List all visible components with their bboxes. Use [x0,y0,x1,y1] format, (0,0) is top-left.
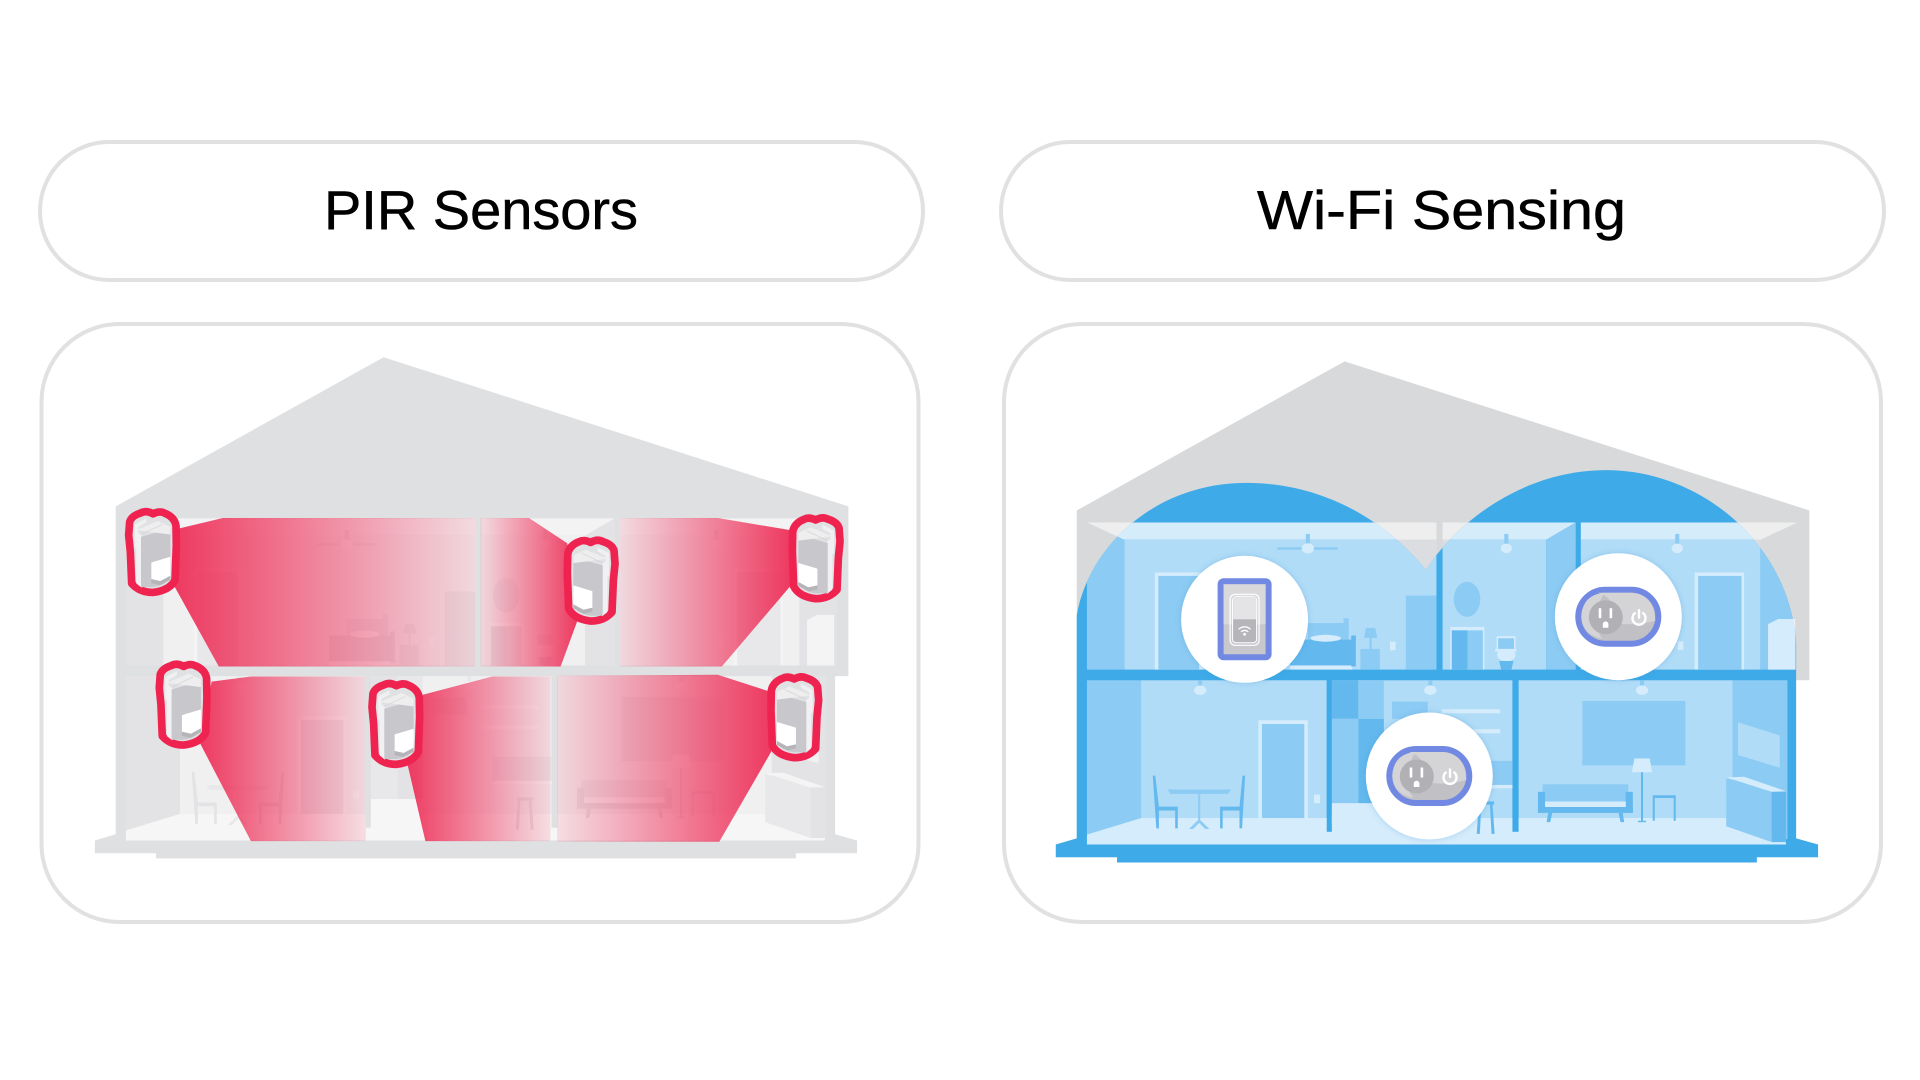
panel: Wi-Fi Sensing heading [1001,142,1884,280]
icon: smart plug, lower centre [1366,712,1493,840]
heading: Wi-Fi Sensing: Wi-Fi Sensing [1257,179,1626,241]
panel: PIR sensors house [42,324,918,922]
house cross-section with blue Wi-Fi coverage [1056,361,1818,862]
infographic: PIR sensors vs Wi-Fi sensing [38,140,1886,924]
icon: PIR sensor, bottom left [159,664,207,745]
icon: PIR sensor, top middle [567,540,615,621]
icon: PIR sensor, bottom middle [372,684,420,764]
icon: smart light switch [1181,556,1308,683]
panel: Wi-Fi sensing house [1004,324,1881,922]
icon: PIR sensor, top left [129,512,176,592]
heading: PIR Sensors: PIR Sensors [324,179,638,241]
red PIR detection beams [174,518,790,842]
icon: PIR sensor, bottom right [771,677,819,758]
icon: PIR sensor, top right [792,518,840,599]
panel: PIR Sensors heading [40,142,923,280]
house cross-section, grey [95,357,857,858]
icon: smart plug, upper right [1555,553,1682,680]
